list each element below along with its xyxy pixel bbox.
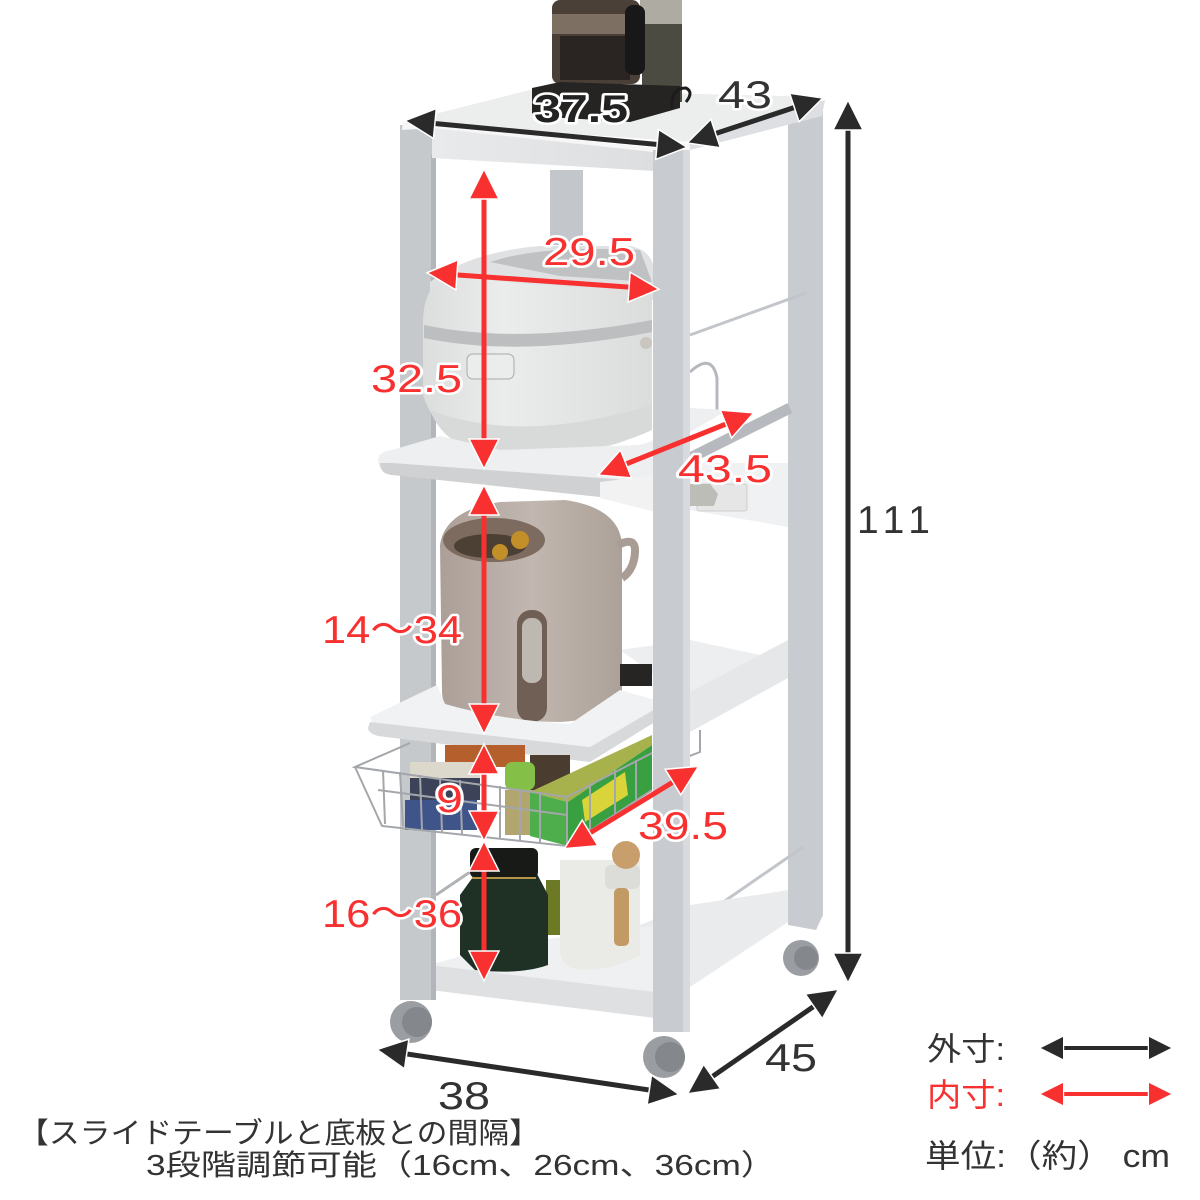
label 29.5: 29.5 [543,231,635,274]
slide shelf upper [378,408,728,512]
inner dimension: 内寸: [927,1077,1005,1113]
label 38: 38 [438,1075,490,1118]
jars [460,841,640,972]
legend [925,1031,1170,1174]
side rails [436,293,806,925]
outer dimension: 外寸: [927,1031,1005,1067]
right front post [653,150,690,1032]
top shelf [402,90,825,171]
label 16-36: 16～36 [322,893,462,936]
note: 3段階調節可能（16cm、26cm、36cm） [146,1149,776,1182]
red dimension arrows [430,172,751,978]
label 9: 9 [436,778,463,821]
label 43: 43 [718,74,772,117]
label 14-34: 14～34 [322,609,462,652]
basket contents [405,735,652,846]
rack [355,0,825,1078]
label 39.5: 39.5 [638,805,728,848]
coffee maker [532,0,690,122]
label 45: 45 [765,1037,817,1080]
bottom shelf [430,925,660,1018]
label 37.5: 37.5 [534,88,628,131]
casters [390,940,819,1078]
note [18,1117,776,1182]
power strip panel [690,463,788,527]
wire basket [355,730,700,846]
label 32.5: 32.5 [371,358,462,401]
rice cooker [423,246,654,456]
label 111: 111 [857,499,930,542]
note: 【スライドテーブルと底板との間隔】 [18,1117,540,1150]
middle back shelf [620,640,788,732]
left front post [400,125,436,1000]
thermos [440,500,652,722]
units: 単位:（約） cm [925,1138,1170,1174]
black dimension arrows [380,99,848,1094]
label 43.5: 43.5 [678,448,772,491]
dimension labels [322,74,930,1118]
cord [690,363,717,412]
outlet [690,484,747,511]
slide shelf lower [368,685,655,762]
bottom back shelf [640,890,788,987]
back right post [788,104,823,930]
back left post [550,170,583,245]
